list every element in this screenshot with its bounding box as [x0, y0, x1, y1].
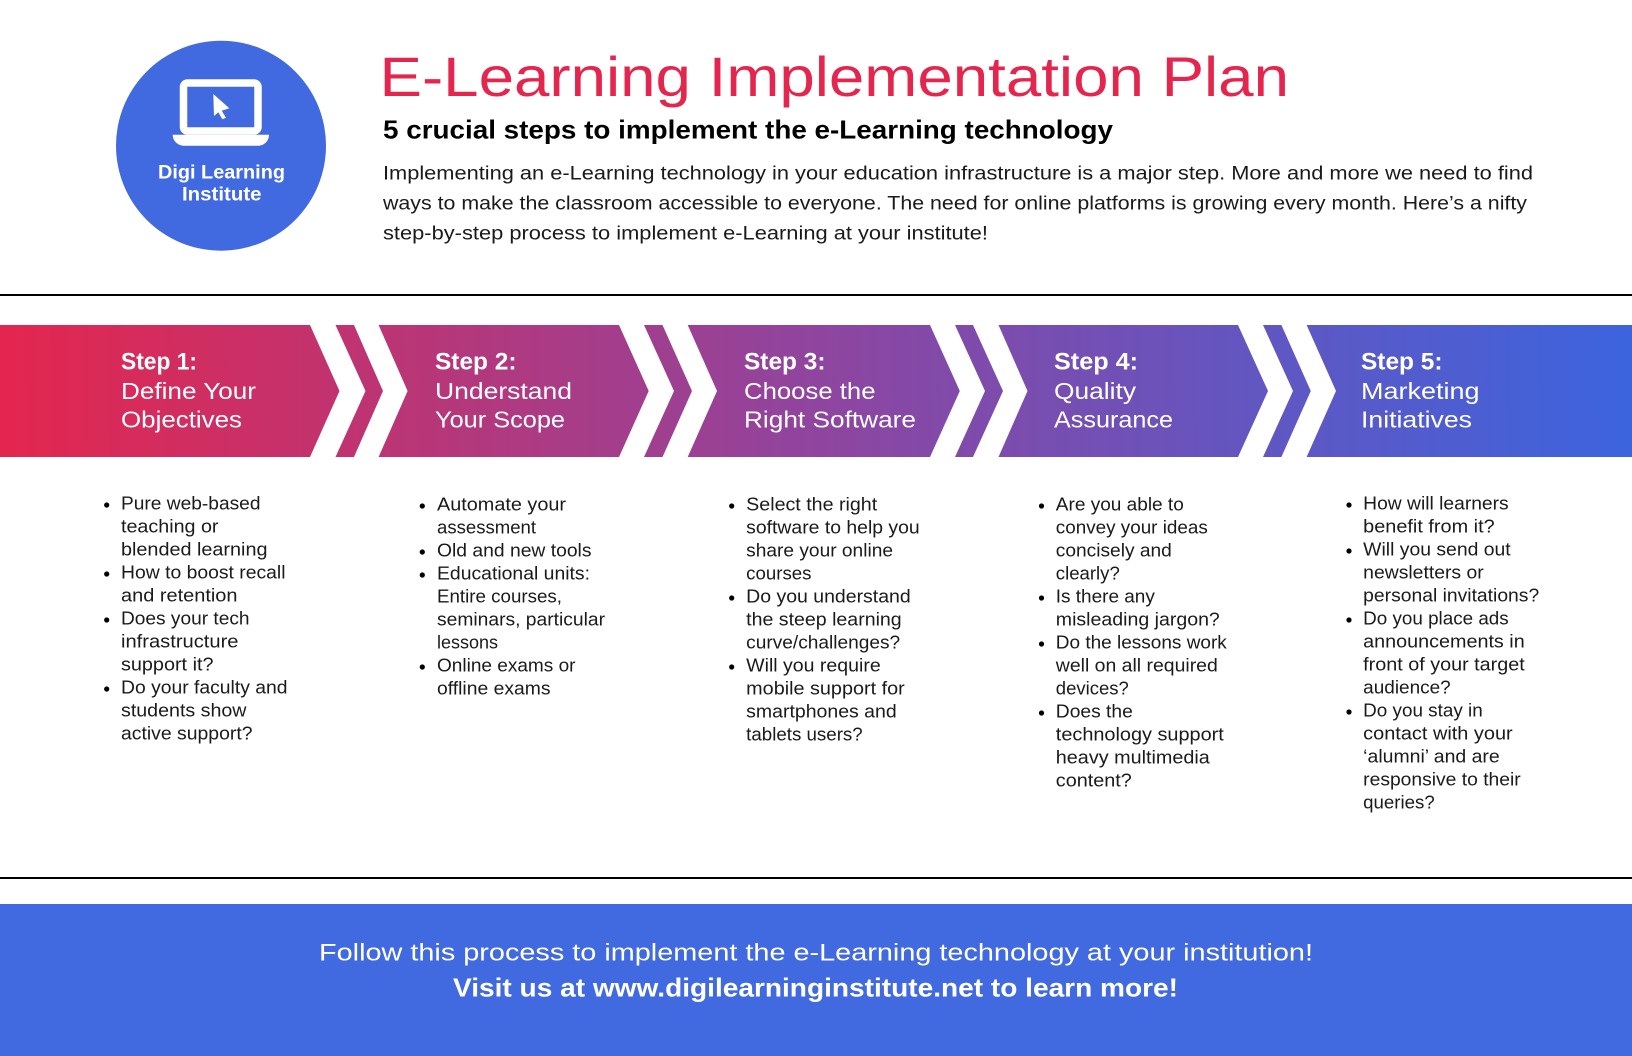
step 5 bullet list: newsletters or — [1363, 562, 1484, 582]
step 3 bullet list: tablets users? — [746, 725, 863, 745]
step 2 bullet list: Entire courses, — [437, 587, 562, 607]
step 4 bullet list: technology support — [1056, 725, 1224, 745]
logo text: Institute — [182, 184, 262, 205]
step 5 bullet list: How will learners — [1363, 493, 1509, 513]
step 2 bullet list: lessons — [437, 633, 498, 653]
intro paragraph: ways to make the classroom accessible to everyone. The need for online platforms is growing every month. Here’s a nifty — [382, 193, 1528, 214]
step 2 bullet list — [420, 495, 605, 699]
step 2 bullet list: seminars, particular — [437, 610, 605, 630]
step 5 label — [1361, 348, 1480, 432]
step 1 bullet list: Pure web-based — [121, 493, 260, 513]
step 1 label — [121, 348, 256, 432]
arrow: step 3 — [688, 325, 960, 457]
intro paragraph: Implementing an e-Learning technology in your education infrastructure is a major step. More and more we need to find — [383, 163, 1533, 184]
step 3 bullet list: mobile support for — [746, 679, 905, 699]
footer banner — [0, 904, 1632, 1056]
step 4 bullet list: Is there any — [1056, 587, 1155, 607]
logo badge — [116, 41, 326, 251]
icon: laptop with cursor — [173, 83, 269, 146]
step 5 label: Marketing — [1361, 378, 1480, 404]
step 5 bullet list: benefit from it? — [1363, 516, 1495, 536]
step 4 bullet list: content? — [1056, 771, 1132, 791]
step 2 bullet list: Old and new tools — [437, 541, 592, 561]
step 1 bullet list: infrastructure — [121, 631, 238, 651]
subtitle: 5 crucial steps to implement the e-Learning technology — [383, 115, 1114, 145]
step 3 bullet list: the steep learning — [746, 610, 902, 630]
step 5 bullet list: announcements in — [1363, 631, 1525, 651]
step 4 bullet list: misleading jargon? — [1056, 610, 1220, 630]
step 5 label: Initiatives — [1361, 406, 1472, 432]
chevron 2 — [644, 325, 692, 457]
step 4 bullet list: Are you able to — [1056, 495, 1184, 515]
chevron 1 — [336, 325, 383, 457]
step 4 label — [1054, 348, 1173, 432]
arrow: step 4 — [998, 325, 1268, 457]
step 1 bullet list: Do your faculty and — [121, 677, 288, 697]
step 5 bullet list — [1346, 493, 1539, 812]
footer call to action: Visit us at www.digilearninginstitute.net to learn more! — [453, 973, 1178, 1003]
step 2 bullet list: offline exams — [437, 679, 550, 699]
step 5 bullet list: contact with your — [1363, 723, 1513, 743]
step 5 bullet list: Do you stay in — [1363, 700, 1483, 720]
step 2 bullet list: Online exams or — [437, 656, 576, 676]
step 3 label — [744, 348, 916, 432]
step 1 bullet list: How to boost recall — [121, 562, 286, 582]
step 2 label: Understand — [435, 378, 572, 404]
step 1 bullet list: blended learning — [121, 539, 268, 559]
step 2 label — [435, 348, 572, 432]
title: E-Learning Implementation Plan — [380, 45, 1289, 108]
step 1 bullet list: and retention — [121, 585, 238, 605]
intro paragraph — [382, 163, 1533, 244]
step 3 bullet list: curve/challenges? — [746, 633, 900, 653]
step 3 label: Step 3: — [744, 348, 826, 375]
arrow: step 1 — [0, 325, 340, 457]
step 5 bullet list: personal invitations? — [1363, 585, 1539, 605]
chevron 3 — [955, 325, 1003, 457]
step 4 bullet list: heavy multimedia — [1056, 748, 1211, 768]
step arrows band — [0, 325, 1632, 457]
step 4 bullet list: Does the — [1056, 702, 1133, 722]
step 4 bullet list: Do the lessons work — [1056, 633, 1228, 653]
logo text — [158, 162, 285, 205]
logo text: Digi Learning — [158, 162, 285, 183]
step 1 bullet list: students show — [121, 700, 248, 720]
step 4 bullet list: well on all required — [1055, 656, 1218, 676]
step 3 bullet list: share your online — [746, 541, 893, 561]
step 5 bullet list: queries? — [1363, 792, 1435, 812]
step 3 bullet list: Select the right — [746, 495, 877, 515]
step 4 bullet list: clearly? — [1056, 564, 1120, 584]
step 4 label: Assurance — [1054, 406, 1173, 432]
step 5 bullet list: ‘alumni’ and are — [1363, 746, 1500, 766]
step 2 label: Step 2: — [435, 348, 516, 375]
chevron 4 — [1263, 325, 1311, 457]
step 2 label: Your Scope — [435, 406, 565, 432]
step 3 bullet list: courses — [746, 564, 812, 584]
footer message: Follow this process to implement the e-Learning technology at your institution! — [319, 940, 1313, 967]
step 4 label: Step 4: — [1054, 348, 1138, 375]
step 1 bullet list: support it? — [121, 654, 214, 674]
step 4 bullet list: devices? — [1056, 679, 1129, 699]
step 1 bullet list: teaching or — [121, 516, 219, 536]
step 3 bullet list: smartphones and — [746, 702, 897, 722]
step 3 bullet list: Will you require — [746, 656, 881, 676]
logo circle — [116, 41, 326, 251]
step 4 bullet list: concisely and — [1056, 541, 1172, 561]
intro paragraph: step-by-step process to implement e-Learning at your institute! — [383, 223, 988, 244]
step 1 label: Objectives — [121, 406, 242, 432]
step 5 bullet list: front of your target — [1363, 654, 1525, 674]
footer background — [0, 904, 1632, 1056]
step 5 bullet list: Will you send out — [1363, 539, 1511, 559]
arrow: step 5 — [1307, 325, 1632, 457]
step 2 bullet list: assessment — [437, 518, 536, 538]
step 1 bullet list: active support? — [121, 723, 252, 743]
step 1 label: Define Your — [121, 378, 256, 404]
step 1 bullet list — [104, 493, 287, 743]
step 2 bullet list: Automate your — [437, 495, 566, 515]
step 3 bullet list — [729, 495, 920, 745]
step 3 label: Choose the — [744, 378, 876, 404]
step 1 bullet list: Does your tech — [121, 608, 250, 628]
step 3 bullet list: software to help you — [746, 518, 920, 538]
step 5 bullet list: audience? — [1363, 677, 1451, 697]
step 2 bullet list: Educational units: — [437, 564, 590, 584]
step 5 bullet list: Do you place ads — [1363, 608, 1509, 628]
step 5 label: Step 5: — [1361, 348, 1442, 375]
step 3 bullet list: Do you understand — [746, 587, 911, 607]
step 4 bullet list: convey your ideas — [1056, 518, 1208, 538]
step 1 label: Step 1: — [121, 348, 197, 375]
step 3 label: Right Software — [744, 406, 916, 432]
step 4 label: Quality — [1054, 378, 1136, 404]
arrow: step 2 — [379, 325, 649, 457]
step 4 bullet list — [1039, 495, 1228, 791]
step 5 bullet list: responsive to their — [1363, 769, 1521, 789]
